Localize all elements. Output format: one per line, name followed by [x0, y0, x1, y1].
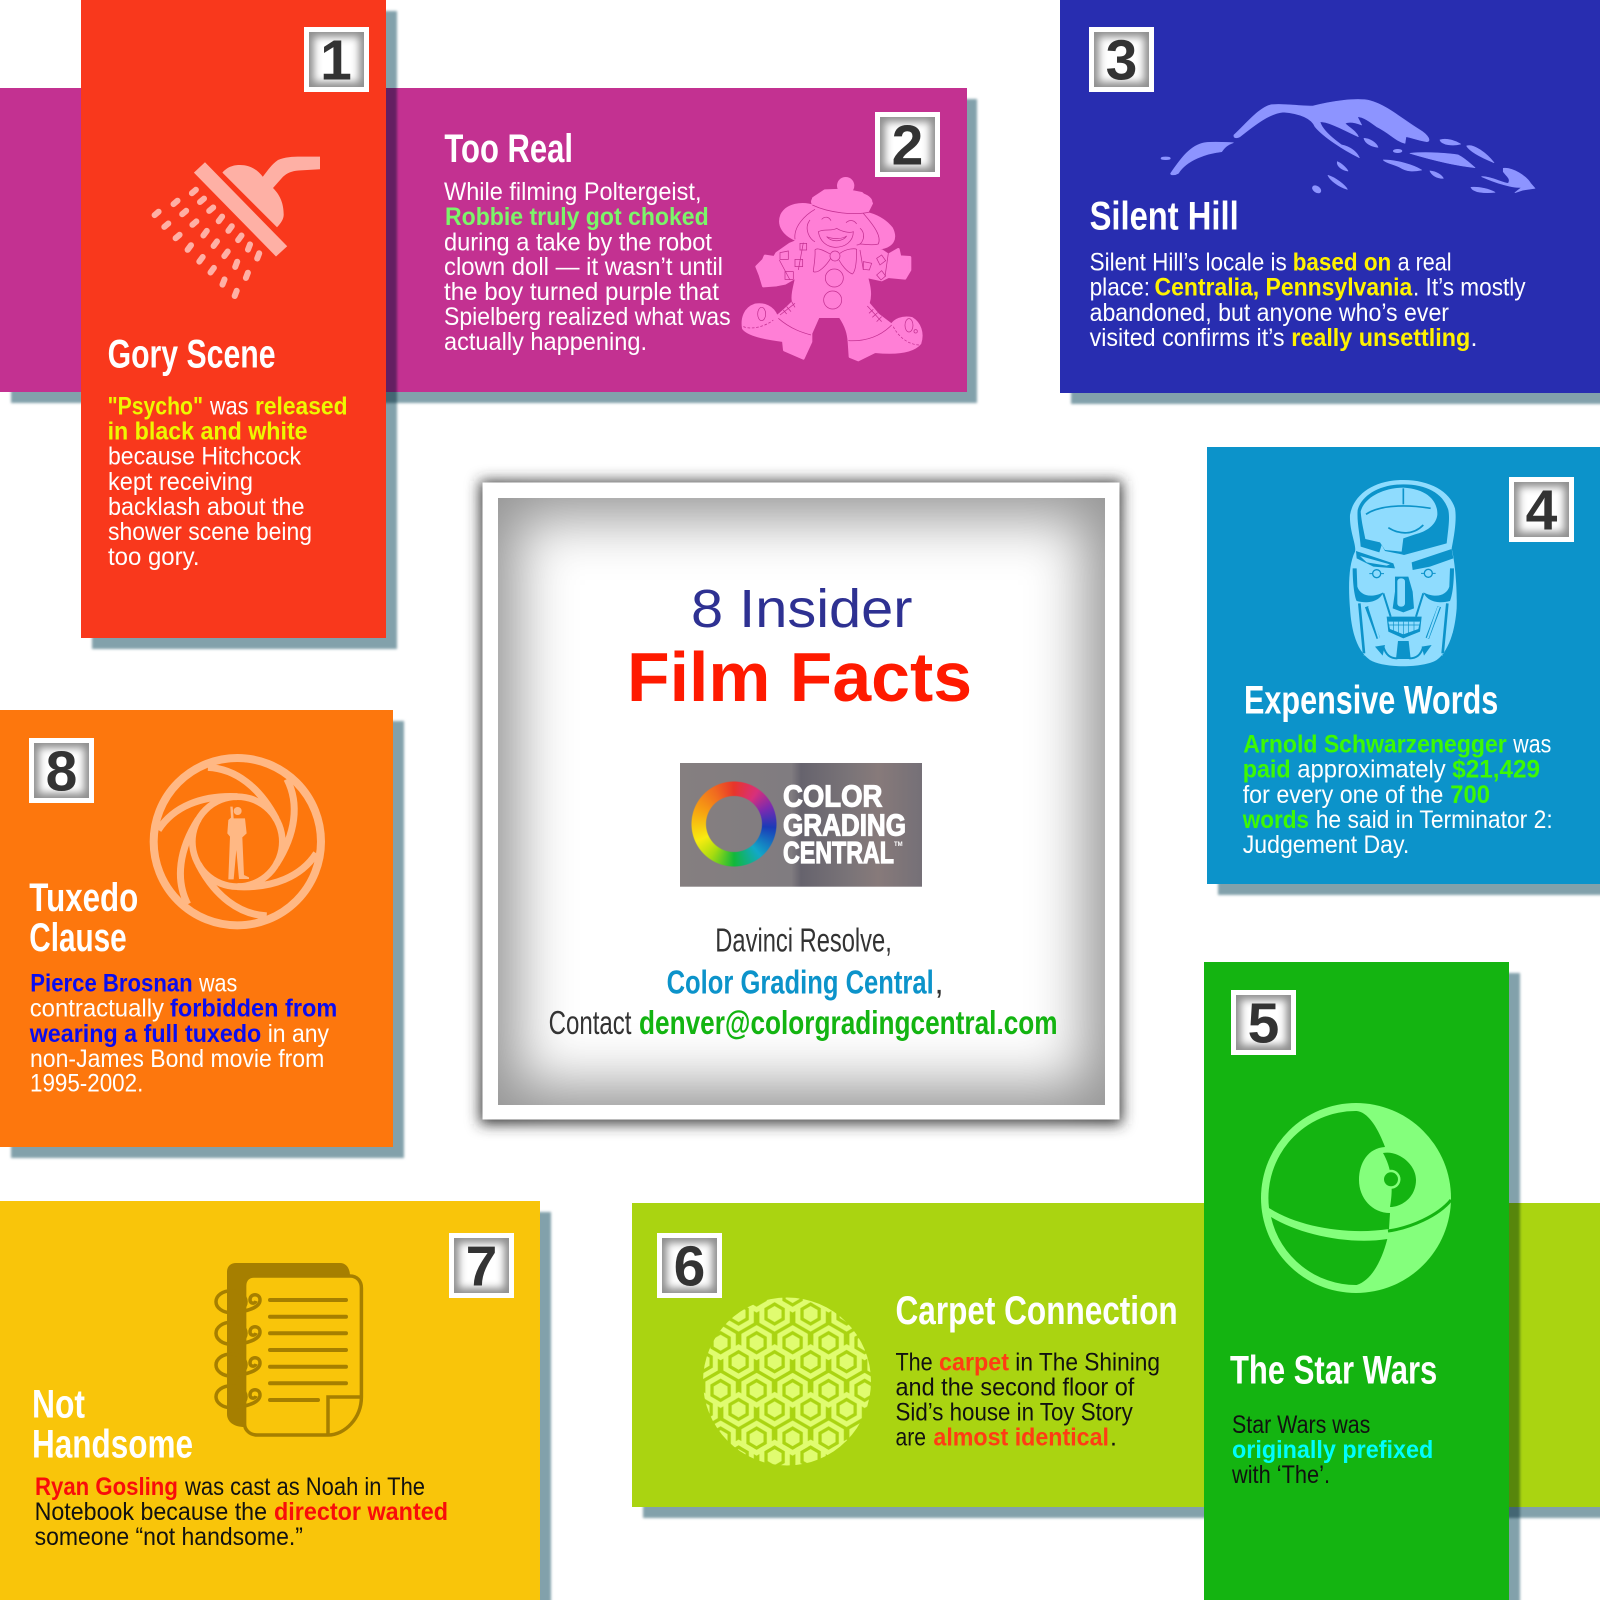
body text: The Star Wars: Star Wars was	[1232, 1411, 1370, 1439]
body text: Gory Scene: because Hitchcock	[108, 443, 301, 471]
panel 7: Not Handsome	[0, 1201, 551, 1600]
body text: Tuxedo Clause: 1995-2002.	[30, 1070, 143, 1098]
body text: Too Real: the boy turned purple that	[444, 278, 719, 306]
badge 3	[1089, 27, 1154, 92]
heading: Carpet Connection: Carpet Connection	[896, 1289, 1178, 1333]
body text: Gory Scene: backlash about the	[108, 493, 305, 521]
badge 2	[875, 112, 940, 178]
body text: Expensive Words	[1242, 731, 1553, 859]
heading: Silent Hill: Silent Hill	[1090, 194, 1239, 238]
body text: The Star Wars: with ‘The’.	[1231, 1461, 1330, 1489]
badge 7: 7	[466, 1234, 497, 1298]
badge 1	[304, 27, 369, 92]
heading: Gory Scene: Gory Scene	[108, 332, 275, 376]
credits text	[549, 922, 1058, 1041]
body text: Silent Hill: abandoned, but anyone who’s ever	[1090, 299, 1449, 327]
body text: Tuxedo Clause: contractually	[30, 995, 164, 1023]
icon: hill	[1161, 99, 1535, 194]
panel 6: Carpet Connection	[632, 1203, 1600, 1518]
badge 8	[29, 738, 94, 804]
body text: Too Real	[444, 178, 731, 356]
badge 8: 8	[46, 740, 77, 804]
badge 1: 1	[320, 28, 352, 92]
icon: clown doll	[743, 177, 921, 360]
body text: Gory Scene: shower scene being	[108, 518, 312, 546]
body text: Carpet Connection: The	[896, 1348, 933, 1376]
logo wordmark: COLOR	[783, 778, 882, 813]
title line: Film Facts: Film Facts	[627, 638, 972, 716]
body text: Carpet Connection	[896, 1348, 1160, 1452]
heading: Not Handsome: Not	[32, 1382, 85, 1426]
body text: Silent Hill: based on	[1293, 249, 1391, 277]
icon: gun barrel spiral with agent	[154, 751, 321, 933]
body text: Too Real: during a take by the robot	[444, 228, 712, 256]
body text: Too Real: Robbie truly got choked	[445, 203, 709, 231]
badge 6	[657, 1233, 722, 1298]
heading: Tuxedo Clause: Clause	[29, 916, 127, 960]
icon: terminator skull	[1349, 480, 1457, 666]
body text: Expensive Words: for every one of the	[1243, 781, 1443, 809]
body text: Not Handsome: someone “not handsome.”	[35, 1523, 303, 1551]
body text: Carpet Connection: are	[896, 1424, 926, 1452]
body text: Silent Hill: a real	[1398, 249, 1452, 277]
body text: Expensive Words: approximately	[1297, 756, 1446, 784]
icon: death star	[1261, 1103, 1451, 1293]
body text: Silent Hill	[1090, 249, 1526, 352]
credits text: denver@colorgradingcentral.com	[639, 1004, 1058, 1041]
body text: Tuxedo Clause: forbidden from	[170, 995, 337, 1023]
badge 2: 2	[892, 114, 923, 178]
body text: Tuxedo Clause: wearing a full tuxedo	[29, 1020, 261, 1048]
icon: shower head	[155, 157, 320, 296]
badge 5: 5	[1248, 992, 1279, 1056]
panel 8: Tuxedo Clause	[0, 710, 404, 1158]
panel 5: The Star Wars	[1204, 962, 1520, 1600]
body text: Gory Scene: was	[209, 393, 248, 421]
icon: overlook carpet pattern	[700, 1295, 875, 1470]
body text: Silent Hill: visited confirms it’s	[1090, 324, 1285, 352]
badge 4	[1509, 477, 1574, 542]
body text: Not Handsome: Ryan Gosling	[35, 1473, 178, 1501]
body text: Expensive Words: words	[1242, 806, 1309, 834]
logo wordmark: CENTRAL	[783, 835, 894, 870]
body text: Silent Hill: really unsettling	[1291, 324, 1470, 352]
body text: Gory Scene	[108, 393, 347, 571]
body text: Carpet Connection: .	[1110, 1424, 1117, 1452]
body text: Expensive Words: Judgement Day.	[1243, 831, 1409, 859]
credits text: Color Grading Central	[667, 964, 934, 1000]
body text: Too Real: actually happening.	[444, 328, 647, 356]
body text: Gory Scene: too gory.	[108, 543, 200, 571]
body text: Tuxedo Clause	[29, 970, 337, 1098]
body text: Gory Scene: "Psycho"	[108, 393, 203, 421]
badge 7	[449, 1233, 514, 1298]
body text: Too Real: While filming Poltergeist,	[444, 178, 702, 206]
heading: Not Handsome: Handsome	[32, 1422, 193, 1466]
body text: Expensive Words: $21,429	[1452, 756, 1540, 784]
body text: Carpet Connection: and the second floor of	[896, 1374, 1134, 1402]
body text: Silent Hill: place:	[1090, 274, 1150, 302]
badge 4: 4	[1526, 478, 1558, 542]
body text: Silent Hill: Silent Hill’s locale is	[1090, 249, 1287, 277]
body text: Expensive Words: he said in Terminator 2:	[1316, 806, 1553, 834]
body text: Not Handsome	[35, 1473, 448, 1551]
body text: Silent Hill: . It’s mostly	[1413, 274, 1526, 302]
body text: Not Handsome: director wanted	[274, 1498, 448, 1526]
body text: Carpet Connection: in The Shining	[1015, 1348, 1160, 1376]
body text: Too Real: clown doll — it wasn’t until	[444, 253, 723, 281]
panel 3: Silent Hill	[1060, 0, 1600, 404]
body text: Tuxedo Clause: in any	[268, 1020, 329, 1048]
body text: Silent Hill: Centralia, Pennsylvania	[1154, 274, 1413, 302]
panel 4: Expensive Words	[1207, 447, 1600, 895]
body text: Gory Scene: kept receiving	[108, 468, 253, 496]
logo wordmark	[783, 778, 906, 870]
heading: Tuxedo Clause: Tuxedo	[29, 876, 138, 920]
title line: 8 Insider: 8 Insider	[691, 579, 913, 639]
body text: Carpet Connection: almost identical	[933, 1424, 1109, 1452]
body text: Expensive Words: 700	[1450, 781, 1490, 809]
logo wordmark: TM	[894, 842, 903, 848]
badge 6: 6	[674, 1234, 705, 1298]
body text: Expensive Words: Arnold Schwarzenegger	[1243, 731, 1507, 759]
body text: Carpet Connection: Sid’s house in Toy Story	[896, 1399, 1133, 1427]
body text: Carpet Connection: carpet	[939, 1348, 1010, 1376]
body text: Tuxedo Clause: non-James Bond movie from	[30, 1045, 324, 1073]
heading: The Star Wars: The Star Wars	[1230, 1348, 1437, 1392]
credits text: Contact	[549, 1004, 632, 1041]
body text: Tuxedo Clause: was	[198, 970, 237, 998]
badge 3: 3	[1106, 28, 1137, 92]
center panel: title card	[480, 481, 1122, 1124]
body text: Gory Scene: in black and white	[108, 418, 308, 446]
body text: Not Handsome: was cast as Noah in The	[184, 1473, 425, 1501]
panel 2: Too Real	[0, 88, 977, 403]
heading: Expensive Words: Expensive Words	[1244, 678, 1498, 722]
body text: Silent Hill: .	[1470, 324, 1477, 352]
body text: Too Real: Spielberg realized what was	[444, 303, 731, 331]
body text: Tuxedo Clause: Pierce Brosnan	[30, 970, 193, 998]
logo: Color Grading Central	[680, 763, 922, 887]
body text: Expensive Words: was	[1512, 731, 1551, 759]
credits text: ,	[934, 964, 944, 1000]
credits text: Davinci Resolve,	[715, 922, 892, 959]
body text: Gory Scene: released	[255, 393, 348, 421]
icon: spiral notebook	[216, 1263, 361, 1435]
body text: The Star Wars	[1231, 1411, 1433, 1489]
heading: Not Handsome	[32, 1382, 193, 1466]
heading: Tuxedo Clause	[29, 876, 138, 960]
panel 1: Gory Scene	[81, 0, 397, 649]
body text: Not Handsome: Notebook because the	[35, 1498, 267, 1526]
body text: Expensive Words: paid	[1243, 756, 1291, 784]
heading: Too Real: Too Real	[444, 127, 573, 171]
icon: colour wheel ring	[690, 780, 778, 868]
body text: The Star Wars: originally prefixed	[1232, 1436, 1433, 1464]
badge 5	[1231, 990, 1296, 1056]
logo wordmark: GRADING	[783, 807, 906, 842]
